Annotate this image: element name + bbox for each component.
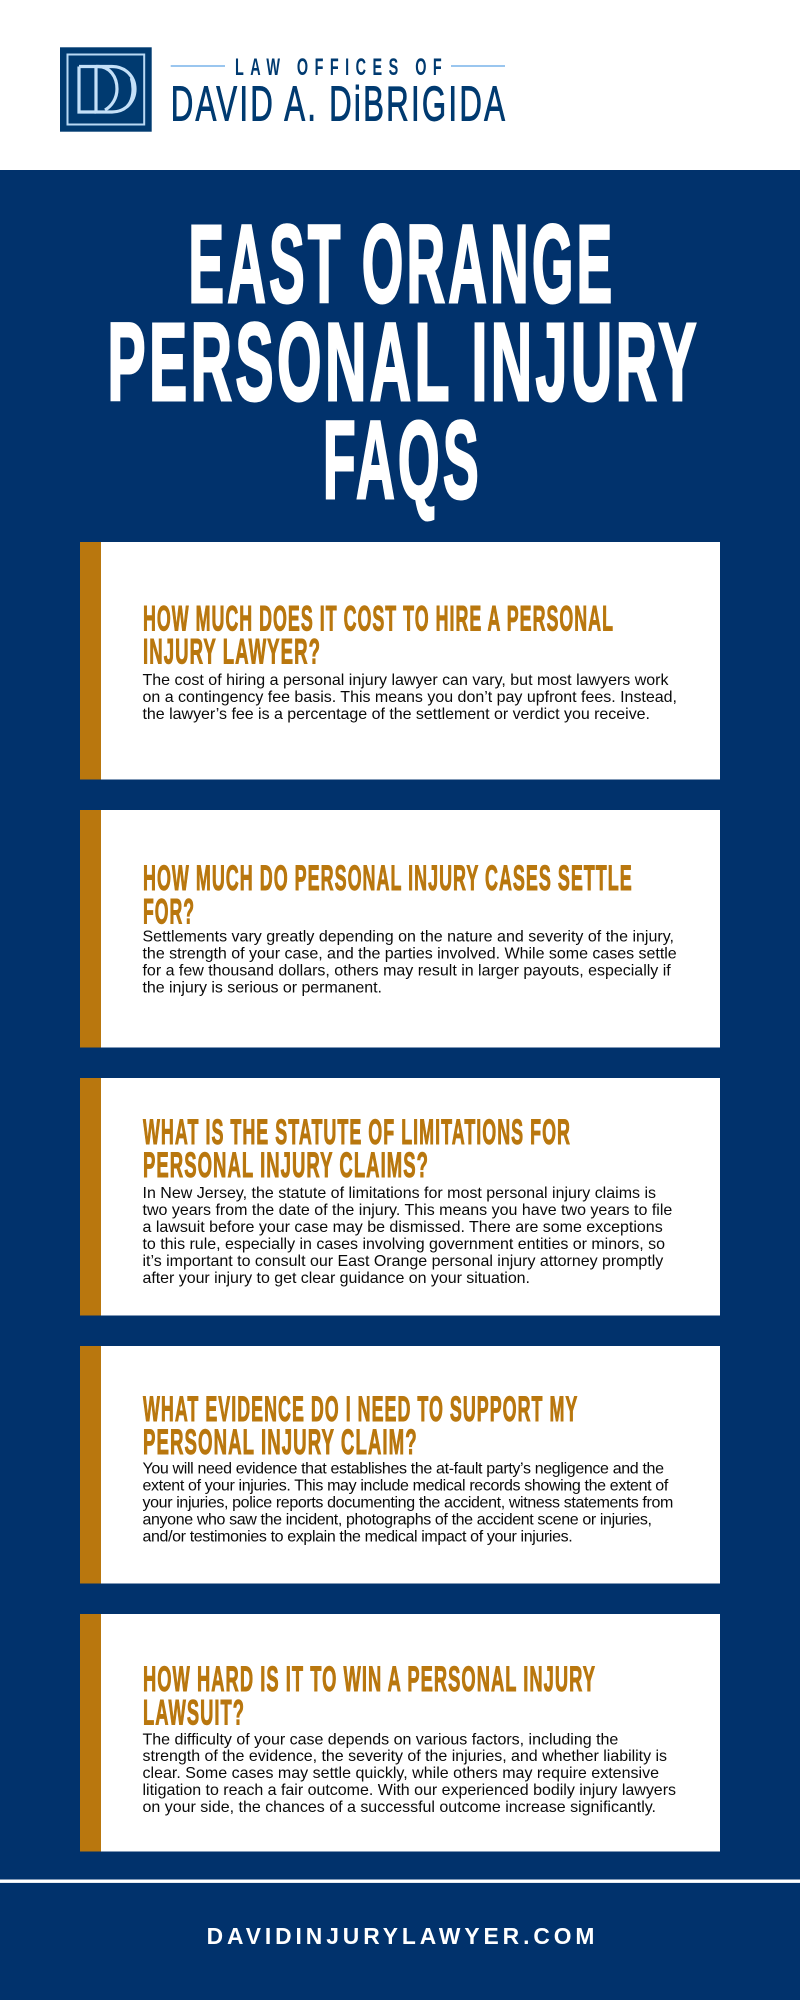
body text: your injuries, police reports documenting the accident, witness statements from [142,1494,673,1511]
logo icon: DD monogram [60,47,152,132]
logo rule right [451,65,505,67]
heading: INJURY LAWYER? [143,632,321,672]
heading [143,1112,571,1185]
body text: on a contingency fee basis. This means you don’t pay upfront fees. Instead, [142,689,677,706]
body text: and/or testimonies to explain the medical impact of your injuries. [142,1528,573,1545]
body text: extent of your injuries. This may include medical records showing the extent of [142,1477,669,1494]
title [108,203,700,522]
body text: Settlements vary greatly depending on the nature and severity of the injury, [142,929,674,946]
body text: In New Jersey, the statute of limitations for most personal injury claims is [142,1185,656,1202]
panel: FAQ 2 settlements [80,810,720,1048]
accent bar [80,542,101,780]
body text: clear. Some cases may settle quickly, while others may require extensive [142,1765,659,1782]
panel: FAQ 5 how hard to win [80,1614,720,1852]
heading [143,858,633,932]
body text: The cost of hiring a personal injury lawyer can vary, but most lawyers work [142,672,670,689]
heading: PERSONAL INJURY CLAIM? [143,1422,418,1462]
body text: it’s important to consult our East Orange personal injury attorney promptly [142,1253,663,1270]
heading: FOR? [143,892,195,932]
footer divider [0,1880,800,1883]
body text: You will need evidence that establishes the at-fault party’s negligence and the [142,1460,664,1477]
heading: PERSONAL INJURY CLAIMS? [143,1145,429,1185]
body text: for a few thousand dollars, others may result in larger payouts, especially if [142,963,671,980]
body text: The difficulty of your case depends on various factors, including the [142,1731,618,1748]
body text [142,672,677,723]
body text: on your side, the chances of a successful outcome increase significantly. [142,1799,656,1816]
accent bar [80,1078,101,1316]
logo text: firm name: DAVID A. DiBRIGIDA [171,78,507,132]
body text: the lawyer’s fee is a percentage of the settlement or verdict you receive. [142,706,650,723]
body text [142,1460,673,1545]
body text: strength of the evidence, the severity of the injuries, and whether liability is [142,1748,667,1765]
header band [0,0,800,170]
body text: the injury is serious or permanent. [142,980,382,997]
heading [143,1389,578,1462]
body text: the strength of your case, and the parties involved. While some cases settle [142,946,677,963]
body text: after your injury to get clear guidance on your situation. [142,1270,530,1287]
body text: two years from the date of the injury. This means you have two years to file [142,1202,672,1219]
title: FAQS [323,399,482,522]
panel: FAQ 1 cost to hire [80,542,720,780]
footer url: DAVIDINJURYLAWYER.COM [207,1923,594,1949]
body text: litigation to reach a fair outcome. With our experienced bodily injury lawyers [142,1782,676,1799]
heading [143,598,614,672]
accent bar [80,1346,101,1584]
body text: anyone who saw the incident, photographs of the accident scene or injuries, [142,1511,652,1528]
body text [142,929,677,997]
body text [142,1731,676,1816]
body text: a lawsuit before your case may be dismissed. There are some exceptions [142,1219,663,1236]
panel: FAQ 4 evidence [80,1346,720,1584]
panel: FAQ 3 statute of limitations [80,1078,720,1316]
heading [143,1659,596,1732]
logo text: law offices of: LAW OFFICES OF [235,54,442,81]
body text [142,1185,672,1287]
logo rule left [171,65,225,67]
accent bar [80,810,101,1048]
heading: LAWSUIT? [143,1692,245,1732]
body text: to this rule, especially in cases involving government entities or minors, so [142,1236,665,1253]
accent bar [80,1614,101,1852]
